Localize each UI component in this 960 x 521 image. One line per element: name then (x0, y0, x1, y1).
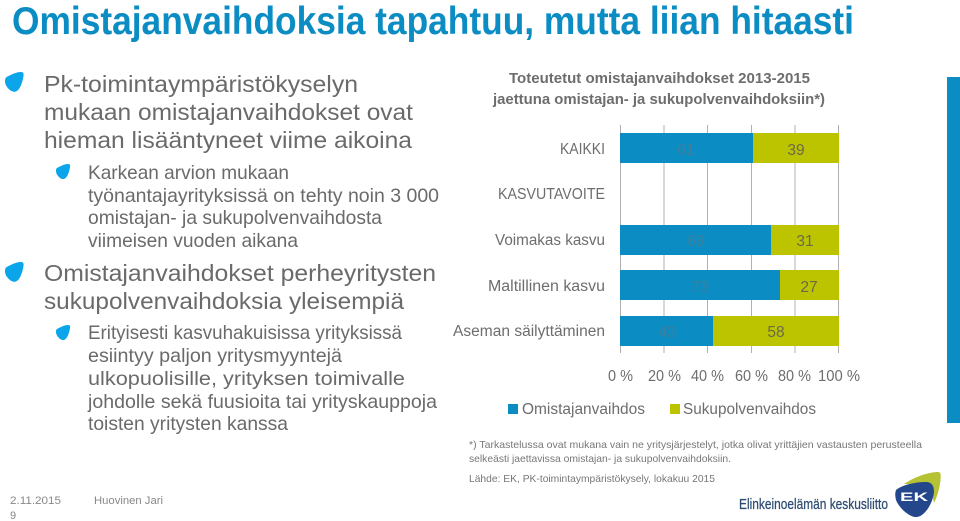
x-axis labels: 100 % (818, 368, 860, 385)
category labels: Voimakas kasvu (495, 232, 605, 249)
category labels: Maltillinen kasvu (488, 278, 605, 295)
bar: Aseman säilyttäminen: 43 (658, 324, 676, 341)
legend: Sukupolvenvaihdos (683, 401, 816, 418)
footnote (469, 439, 922, 465)
icon: bullet 1 (5, 72, 24, 92)
x-axis labels (608, 368, 860, 385)
x-axis labels: 40 % (691, 368, 724, 385)
chart title (492, 70, 825, 108)
text: sub-bullet 2: esiintyy paljon yritysmyyntejä (88, 345, 342, 367)
chart title: jaettuna omistajan- ja sukupolvenvaihdoksiin*) (492, 91, 825, 108)
text: bullet 1 (44, 71, 413, 153)
right accent bar (947, 77, 960, 423)
bar: Maltillinen kasvu: 73 (691, 279, 709, 296)
legend (508, 401, 816, 418)
text: bullet 1: hieman lisääntyneet viime aikoina (44, 127, 413, 153)
icon: bullet 2 (5, 262, 24, 282)
footer author: Huovinen Jari (94, 495, 163, 507)
chart title: Toteutetut omistajanvaihdokset 2013-2015 (509, 70, 810, 87)
text: sub-bullet 2: johdolle sekä fuusioita tai yrityskauppoja (87, 391, 437, 413)
text: sub-bullet 1: työnantajayrityksissä on tehty noin 3 000 (88, 185, 439, 207)
text: bullet 1: Pk-toimintaympäristökyselyn (44, 71, 358, 97)
category labels: KAIKKI (560, 141, 605, 158)
text: sub-bullet 2: Erityisesti kasvuhakuisissa yrityksissä (88, 322, 402, 344)
grid lines (620, 125, 838, 353)
x-axis labels: 0 % (608, 368, 633, 385)
text: bullet 2: sukupolvenvaihdoksia yleisempiä (44, 288, 405, 314)
bar: KAIKKI (620, 133, 839, 163)
source: Lähde: EK, PK-toimintaympäristökysely, lokakuu 2015 (469, 473, 715, 485)
logo: Elinkeinoelämän keskusliitto (739, 496, 888, 513)
bar chart (453, 125, 860, 385)
x-axis labels: 80 % (778, 368, 811, 385)
footnote: *) Tarkastelussa ovat mukana vain ne yritysjärjestelyt, jotka olivat yrittäjien vastausten perusteella (469, 439, 922, 451)
text: bullet 2: Omistajanvaihdokset perheyritysten (44, 260, 436, 286)
logo: EK (900, 490, 929, 504)
icon: sub-bullet 1 (56, 164, 70, 179)
text: bullet 1: mukaan omistajanvaihdokset ovat (44, 99, 413, 125)
category labels: Aseman säilyttäminen (453, 323, 605, 340)
logo (739, 472, 941, 517)
text: sub-bullet 2: ulkopuolisille, yrityksen toimivalle (88, 368, 405, 390)
legend: Omistajanvaihdos (522, 401, 645, 418)
title: Omistajanvaihdoksia tapahtuu, mutta liian hitaasti (12, 0, 854, 43)
icon: sub-bullet 2 (56, 325, 70, 340)
text: sub-bullet 2: toisten yritysten kanssa (88, 413, 288, 435)
text: sub-bullet 2 (87, 322, 437, 435)
text: sub-bullet 1: viimeisen vuoden aikana (88, 230, 298, 252)
text: sub-bullet 1 (88, 162, 439, 252)
text: bullet 2 (44, 260, 436, 314)
x-axis labels: 20 % (648, 368, 681, 385)
footnote: selkeästi jaettavissa omistajan- ja sukupolvenvaihdoksiin. (469, 453, 731, 465)
bar: Voimakas kasvu: 69 (687, 233, 705, 250)
footer date: 2.11.2015 (10, 495, 61, 507)
bar: KAIKKI: 61 (677, 142, 695, 159)
category labels: KASVUTAVOITE (498, 186, 605, 203)
bar: KAIKKI: 39 (787, 142, 805, 159)
text: sub-bullet 1: Karkean arvion mukaan (88, 162, 289, 184)
bar: Maltillinen kasvu (620, 270, 839, 300)
bar: Voimakas kasvu: 31 (796, 233, 814, 250)
panel: left bullet text (5, 71, 439, 435)
bar: Aseman säilyttäminen: 58 (767, 324, 785, 341)
bar: Voimakas kasvu (620, 225, 839, 255)
bar: Maltillinen kasvu: 27 (800, 279, 818, 296)
x-axis labels: 60 % (735, 368, 768, 385)
bar: Aseman säilyttäminen (620, 316, 839, 346)
text: sub-bullet 1: omistajan- ja sukupolvenvaihdosta (88, 207, 382, 229)
category labels (453, 141, 605, 340)
